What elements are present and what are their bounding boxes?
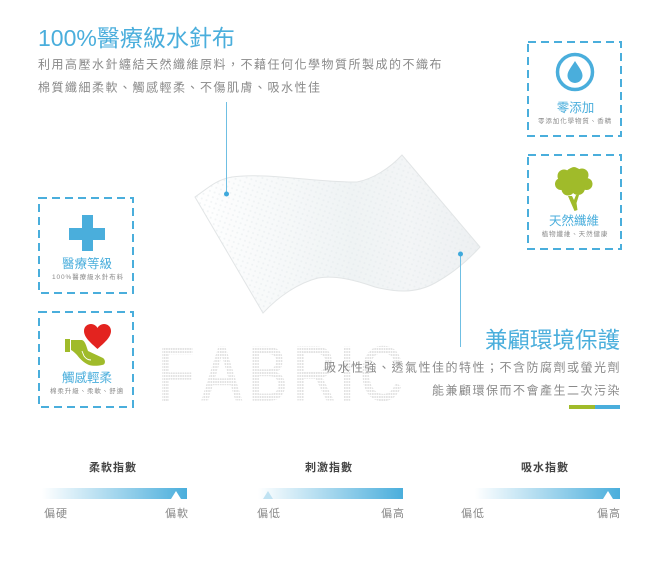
absorbency index (461, 460, 621, 520)
absorbency index: 偏高 (597, 506, 621, 520)
panel: gentle touch: 觸感輕柔 (62, 370, 112, 385)
heading: eco friendly: 兼顧環境保護 (485, 328, 620, 353)
panel: natural fiber (528, 155, 621, 249)
softness index: 偏硬 (44, 507, 68, 520)
panel: gentle touch (39, 312, 133, 407)
title: 100%醫療級水針布 (38, 25, 235, 51)
irritation index (257, 460, 405, 520)
absorbency index: 偏低 (461, 506, 485, 520)
panel: gentle touch: 棉柔升級、柔軟、舒適 (50, 386, 124, 395)
irritation index: 刺激指數 (305, 460, 353, 474)
icon: water drop (558, 54, 592, 90)
intro text (38, 56, 443, 94)
fabric swatch (195, 155, 480, 313)
panel: medical grade: 醫療等級 (62, 256, 112, 271)
icon: tree (555, 167, 592, 211)
intro text: 棉質纖細柔軟、觸感輕柔、不傷肌膚、吸水性佳 (38, 80, 322, 94)
fabric watermark: FABRIC (158, 332, 403, 417)
intro text: 利用高壓水針纏結天然纖維原料，不藉任何化學物質所製成的不織布 (38, 56, 443, 72)
panel: no additives (528, 42, 621, 136)
softness index: 偏軟 (165, 506, 189, 520)
panel: medical grade (39, 198, 133, 293)
callout line: right (458, 252, 463, 347)
panel: natural fiber: 天然纖維 (549, 213, 599, 228)
icon: medical cross (69, 215, 105, 251)
eco text: 能兼顧環保而不會產生二次污染 (432, 382, 621, 398)
eco text: 吸水性強、透氣性佳的特性；不含防腐劑或螢光劑 (324, 360, 621, 374)
eco text (324, 360, 621, 398)
callout line: top (224, 102, 229, 196)
panel: no additives: 零添加化學物質、香精 (538, 116, 612, 125)
softness index (42, 460, 189, 520)
panel: natural fiber: 植物纖維、天然健康 (542, 229, 608, 238)
absorbency index: 吸水指數 (521, 460, 569, 474)
panel: no additives: 零添加 (557, 101, 594, 115)
irritation index: 偏低 (257, 506, 281, 520)
icon: heart in hand (65, 324, 111, 366)
panel: medical grade: 100%醫療級水針布料 (52, 272, 124, 281)
softness index: 柔軟指數 (89, 460, 137, 474)
accent bar (569, 405, 620, 409)
irritation index: 偏高 (381, 506, 405, 520)
